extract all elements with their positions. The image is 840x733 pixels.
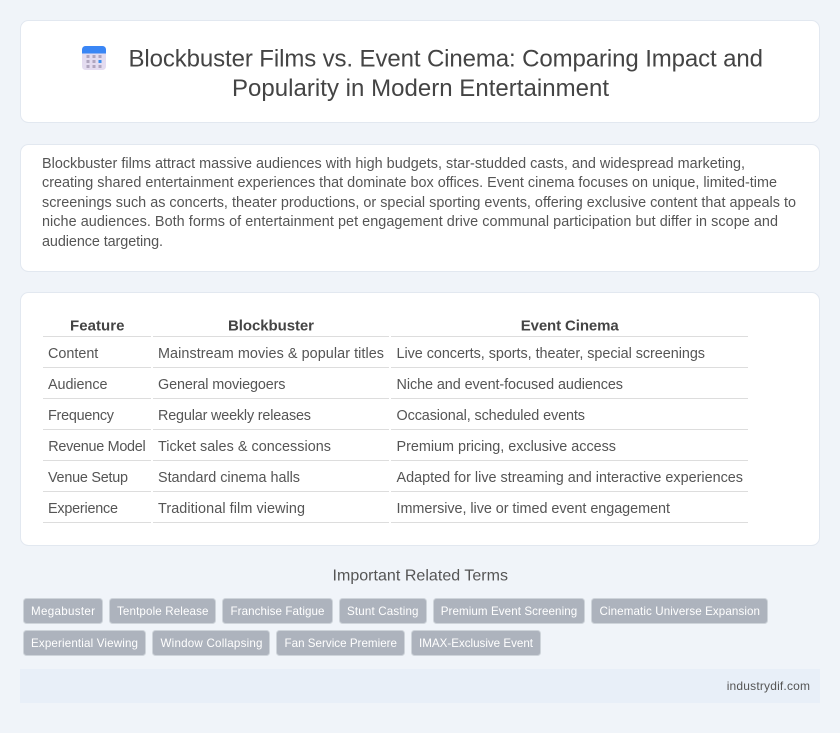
row: experience: Traditional film viewing <box>158 501 305 517</box>
row: revenue model: Revenue Model <box>48 439 146 455</box>
row: revenue model <box>48 439 616 455</box>
row: content: Mainstream movies & popular titles <box>158 346 384 362</box>
icon: calendar <box>82 46 106 70</box>
row: frequency: Regular weekly releases <box>158 408 311 424</box>
row: content: Content <box>48 346 98 362</box>
tag: Franchise Fatigue: Franchise Fatigue <box>230 605 324 618</box>
text block: description: screenings such as concerts, theater productions, or special sporting events, offering exclusive content that appeals to <box>42 195 796 211</box>
tag: IMAX-Exclusive Event <box>412 630 540 656</box>
panel: title header <box>20 20 820 122</box>
row: audience <box>48 377 623 393</box>
text block: description: Blockbuster films attract massive audiences with high budgets, star-studded casts, and widespread marketing, <box>42 156 745 172</box>
row: venue setup <box>48 470 743 486</box>
footer <box>20 669 820 703</box>
row: venue setup: Adapted for live streaming and interactive experiences <box>396 470 743 486</box>
tag: Cinematic Universe Expansion: Cinematic Universe Expansion <box>600 605 760 618</box>
row: content: Live concerts, sports, theater, special screenings <box>396 346 705 362</box>
tag: Tentpole Release: Tentpole Release <box>117 605 208 618</box>
footer source text: industrydif.com <box>727 679 810 693</box>
tag: Tentpole Release <box>110 598 216 624</box>
tag: IMAX-Exclusive Event: IMAX-Exclusive Event <box>419 637 534 650</box>
row: audience: Audience <box>48 377 108 393</box>
tag: Cinematic Universe Expansion <box>592 598 768 624</box>
tag: Stunt Casting: Stunt Casting <box>347 605 418 618</box>
panel: comparison table <box>20 292 820 546</box>
panel: description <box>20 144 820 272</box>
row: experience: Immersive, live or timed event engagement <box>396 501 670 517</box>
text block: description: audience targeting. <box>42 234 163 250</box>
heading: related terms: Important Related Terms <box>332 568 508 585</box>
row: venue setup: Venue Setup <box>48 470 128 486</box>
row: venue setup: Standard cinema halls <box>158 470 300 486</box>
tag: Franchise Fatigue <box>222 598 332 624</box>
row: content <box>48 346 705 362</box>
row: revenue model: Ticket sales & concessions <box>158 439 331 455</box>
row: audience: General moviegoers <box>158 377 286 393</box>
tag: Window Collapsing <box>152 630 270 656</box>
row: frequency <box>48 408 585 424</box>
title <box>128 46 763 102</box>
title: Blockbuster Films vs. Event Cinema: Comparing Impact and <box>128 46 763 72</box>
table header: Blockbuster <box>228 318 314 335</box>
row: experience <box>48 501 670 517</box>
tag: Megabuster <box>24 598 102 624</box>
text block: description: creating shared entertainment experiences that dominate box offices. Event cinema focuses on unique, limited-time <box>42 175 777 191</box>
tag: Premium Event Screening <box>434 598 584 624</box>
tag: Premium Event Screening: Premium Event Screening <box>441 605 577 618</box>
tag: Megabuster: Megabuster <box>31 605 95 618</box>
tag: Experiential Viewing <box>24 630 146 656</box>
title: Popularity in Modern Entertainment <box>232 75 609 102</box>
row: revenue model: Premium pricing, exclusive access <box>396 439 616 455</box>
table header <box>70 318 619 335</box>
tag: Fan Service Premiere <box>276 630 404 656</box>
row: experience: Experience <box>48 501 118 517</box>
table header: Feature <box>70 318 124 335</box>
text block: description <box>42 156 796 250</box>
tag: Fan Service Premiere: Fan Service Premiere <box>284 637 397 650</box>
row: frequency: Occasional, scheduled events <box>396 408 585 424</box>
text block: description: niche audiences. Both forms of entertainment pet engagement drive communal participation but differ in scope and <box>42 214 778 230</box>
table header: Event Cinema <box>521 318 619 335</box>
row: frequency: Frequency <box>48 408 115 424</box>
tags: related terms <box>24 598 768 656</box>
row: audience: Niche and event-focused audiences <box>396 377 623 393</box>
tag: Experiential Viewing: Experiential Viewing <box>31 637 138 650</box>
tag: Window Collapsing: Window Collapsing <box>160 637 262 650</box>
tag: Stunt Casting <box>340 598 426 624</box>
